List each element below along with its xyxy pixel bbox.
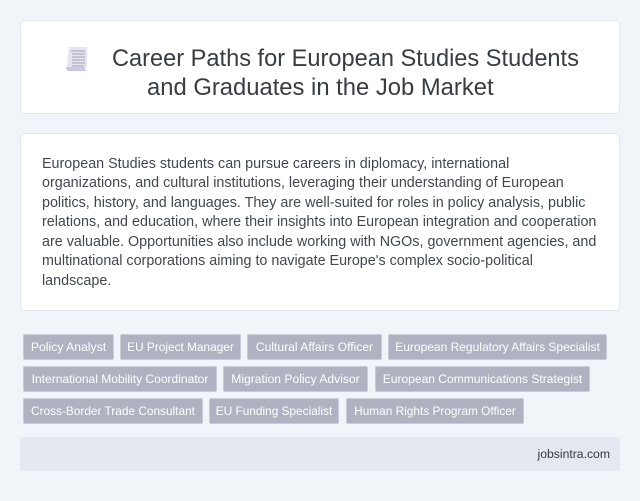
tag <box>375 366 590 392</box>
intro text panel <box>20 133 620 311</box>
intro paragraph: landscape. <box>42 273 111 289</box>
title: Career Paths for European Studies Students <box>112 46 579 72</box>
tag <box>209 398 339 424</box>
tag <box>247 334 382 360</box>
title: and Graduates in the Job Market <box>147 74 494 101</box>
footer bar <box>20 437 620 471</box>
career tags <box>23 334 607 424</box>
intro paragraph <box>42 156 596 289</box>
tag <box>23 366 217 392</box>
intro paragraph: politics, history, and languages. They are well-suited for roles in policy analysis, public <box>42 195 585 211</box>
tag <box>23 334 114 360</box>
title <box>112 46 579 101</box>
tag: European Regulatory Affairs Specialist <box>395 340 600 354</box>
tag: Cultural Affairs Officer <box>256 340 373 354</box>
tag <box>346 398 524 424</box>
tag <box>120 334 241 360</box>
intro paragraph: relations, and education, where their insights into European integration and cooperation <box>42 214 596 230</box>
tag: EU Funding Specialist <box>216 404 332 418</box>
tag: Human Rights Program Officer <box>354 404 516 418</box>
tag: Migration Policy Advisor <box>231 372 360 386</box>
intro paragraph: European Studies students can pursue careers in diplomacy, international <box>42 156 509 172</box>
icon: document scroll <box>66 47 87 71</box>
header panel <box>20 20 620 114</box>
intro paragraph: are valuable. Opportunities also include working with NGOs, government agencies, and <box>42 234 596 250</box>
footer source text: jobsintra.com <box>538 447 610 461</box>
tag: Cross-Border Trade Consultant <box>31 404 195 418</box>
tag <box>23 398 203 424</box>
tag: European Communications Strategist <box>383 372 582 386</box>
tag: International Mobility Coordinator <box>32 372 208 386</box>
tag: Policy Analyst <box>31 340 106 354</box>
tag <box>223 366 368 392</box>
tag <box>388 334 607 360</box>
tag: EU Project Manager <box>127 340 234 354</box>
intro paragraph: organizations, and cultural institutions, leveraging their understanding of European <box>42 175 564 191</box>
intro paragraph: multinational corporations aiming to navigate Europe's complex socio-political <box>42 253 533 269</box>
